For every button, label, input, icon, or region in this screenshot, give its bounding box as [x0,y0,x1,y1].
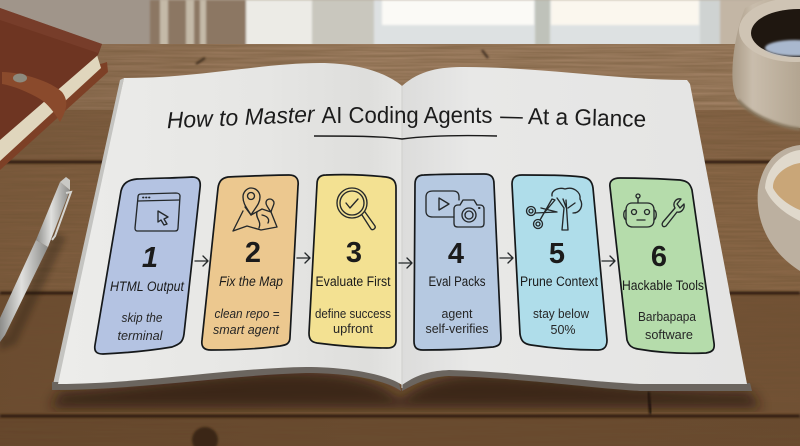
notebook stud [13,74,27,82]
title: — At a Glance [500,102,647,132]
icon: scissors and tree [526,188,582,230]
step 3 panel: Evaluate First: 3 [346,237,362,269]
step 3 panel: Evaluate First: define success [315,306,391,321]
step 2 panel: Fix the Map: smart agent [213,322,280,337]
step 4 panel: Eval Packs: Eval Packs [428,274,486,289]
step 3 panel: Evaluate First: Evaluate First [316,274,391,289]
coffee surface [751,9,800,57]
notebook strap [2,72,66,122]
step 4 panel: Eval Packs [414,174,501,350]
coffee cup: lower right [758,145,800,271]
open book [52,63,752,391]
title: AI Coding Agents [322,102,492,128]
step 3 panel: Evaluate First: upfront [333,321,373,336]
arrow 1 to 2 [195,256,208,266]
latte surface [773,163,800,210]
step 5 panel: Prune Context: 5 [549,238,565,270]
step 4 panel: Eval Packs: 4 [448,238,464,270]
pen: silver ballpoint [0,177,71,350]
step 1 panel: HTML Output: terminal [118,328,164,343]
book edge: left page stack [52,78,124,389]
title underline [314,136,497,139]
title [166,101,647,139]
background: room wall and window [0,0,800,46]
step 4 panel: Eval Packs: self-verifies [426,321,489,336]
icon: magnifying glass with check mark [337,188,375,230]
step 2 panel: Fix the Map: 2 [245,237,261,269]
step 6 panel: Hackable Tools: software [645,327,693,342]
step 2 panel: Fix the Map: clean repo = [214,306,280,321]
right page [402,67,747,385]
book edge: page thickness [52,366,401,391]
step 1 panel: HTML Output: skip the [122,310,162,325]
step 6 panel: Hackable Tools: Barbapapa [638,309,697,324]
step 1 panel: HTML Output [95,177,200,354]
title: How to Master [166,101,316,133]
step 4 panel: Eval Packs: agent [442,306,473,321]
step 5 panel: Prune Context [512,175,607,350]
step 6 panel: Hackable Tools: 6 [651,241,667,273]
arrow 5 to 6 [602,256,615,266]
icon: robot head and wrench [624,194,684,227]
step 3 panel: Evaluate First [309,175,396,348]
step 6 panel: Hackable Tools: Hackable Tools [622,278,704,293]
step 5 panel: Prune Context: 50% [550,322,576,337]
arrow 2 to 3 [297,253,310,263]
book shadow [50,371,762,408]
step 2 panel: Fix the Map: Fix the Map [219,274,283,289]
step 5 panel: Prune Context: Prune Context [520,274,598,289]
left page [58,63,402,385]
arrow 4 to 5 [500,253,513,263]
step 6 panel: Hackable Tools [610,178,714,353]
step 5 panel: Prune Context: stay below [533,306,590,321]
step 2 panel: Fix the Map [202,175,298,350]
coffee cup: top right [732,0,800,129]
notebook: brown leather [0,8,108,170]
step 1 panel: HTML Output: 1 [142,242,158,274]
icon: map with location pins [233,188,277,231]
icon: browser window with cursor [135,193,180,231]
step 1 panel: HTML Output: HTML Output [110,279,185,294]
icon: video player and camera [426,191,484,227]
arrow 3 to 4 [399,258,412,268]
